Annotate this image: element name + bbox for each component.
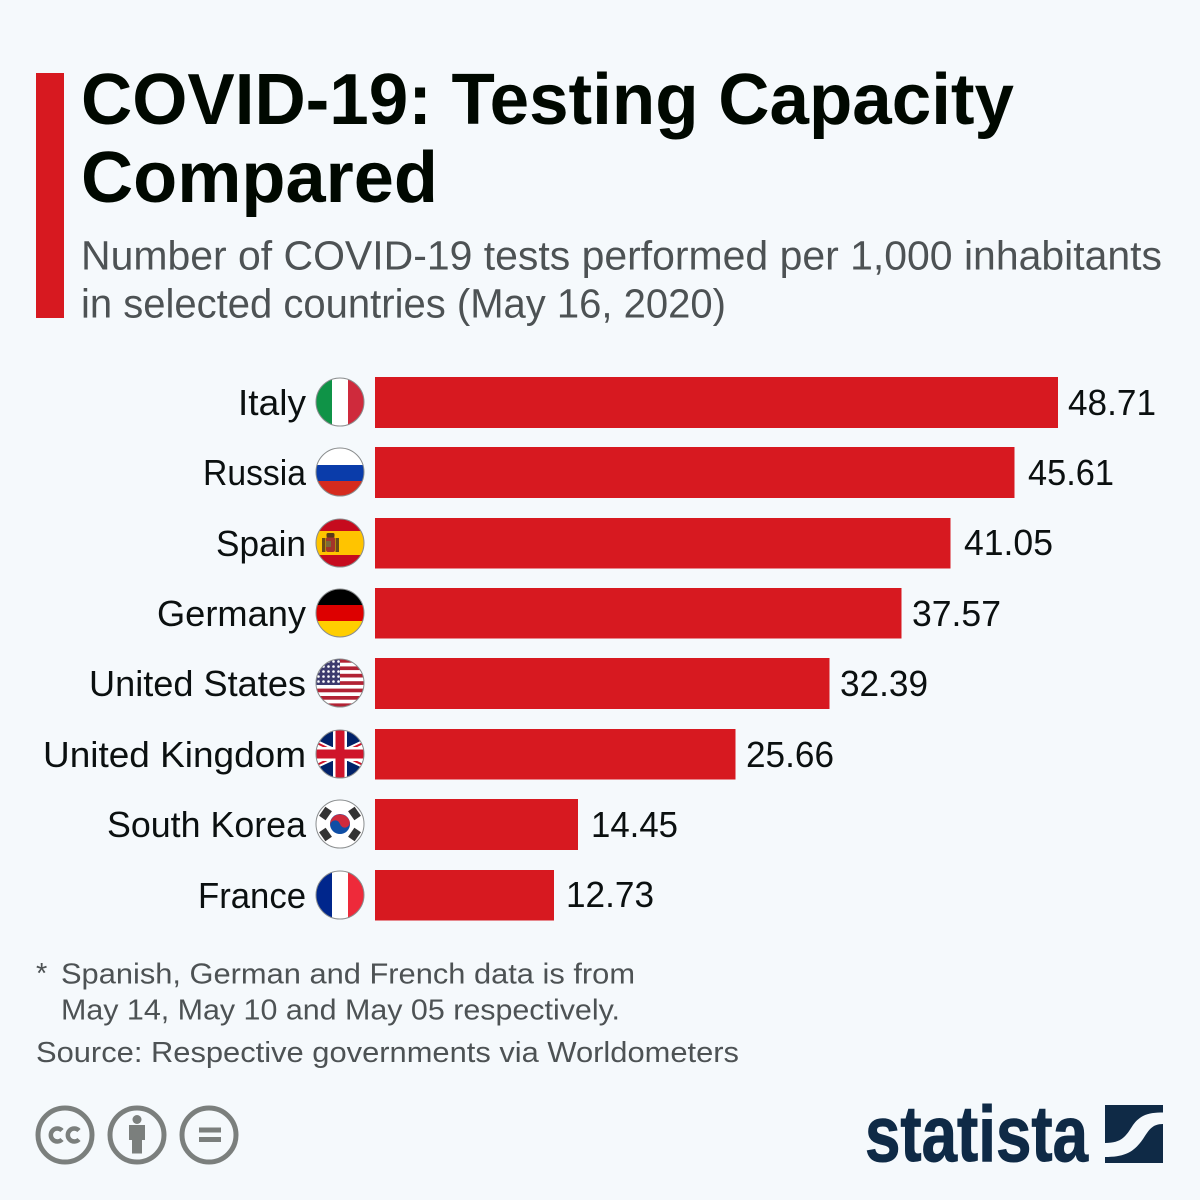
footnote: *: [36, 958, 47, 990]
row: Russia: Russia: [203, 452, 307, 493]
row: Germany: 37.57: [912, 593, 1001, 634]
statista logo: statista: [865, 1089, 1089, 1178]
row: Russia: 45.61: [1028, 452, 1114, 493]
row: United Kingdom: 25.66: [746, 734, 834, 775]
title: [81, 60, 1014, 218]
row: Italy: 48.71: [1068, 382, 1156, 423]
row: Spain: Spain: [216, 523, 306, 564]
footnote: May 14, May 10 and May 05 respectively.: [61, 994, 620, 1026]
icon: attribution: [110, 1108, 164, 1162]
row: Germany: Germany: [157, 593, 306, 634]
source: Source: Respective governments via Worldometers: [36, 1037, 739, 1069]
row: South Korea: South Korea: [107, 804, 307, 845]
row: Italy: [238, 377, 1156, 428]
row: France: France: [198, 875, 306, 916]
row: Spain: [216, 518, 1053, 568]
title: Compared: [81, 138, 438, 218]
bar chart: [43, 377, 1156, 920]
row: Italy: Italy: [238, 382, 306, 423]
accent bar: [36, 73, 64, 318]
subtitle: Number of COVID-19 tests performed per 1,000 inhabitants: [81, 232, 1162, 278]
row: South Korea: [107, 799, 678, 850]
row: United Kingdom: United Kingdom: [43, 734, 306, 775]
row: United States: 32.39: [840, 663, 928, 704]
subtitle: in selected countries (May 16, 2020): [81, 280, 726, 326]
row: United States: [89, 658, 928, 709]
row: United States: United States: [89, 663, 306, 704]
row: Spain: 41.05: [964, 522, 1053, 563]
row: France: 12.73: [566, 874, 654, 915]
row: Germany: [157, 588, 1001, 638]
icon: creative commons: [38, 1108, 92, 1162]
row: France: [198, 870, 654, 920]
footnote: Spanish, German and French data is from: [61, 958, 635, 990]
footnote: [36, 958, 635, 1026]
subtitle: [81, 232, 1162, 326]
row: Russia: [203, 447, 1114, 498]
icon: no derivatives: [182, 1108, 236, 1162]
row: South Korea: 14.45: [591, 804, 678, 845]
row: United Kingdom: [43, 729, 834, 780]
title: COVID-19: Testing Capacity: [81, 60, 1014, 140]
